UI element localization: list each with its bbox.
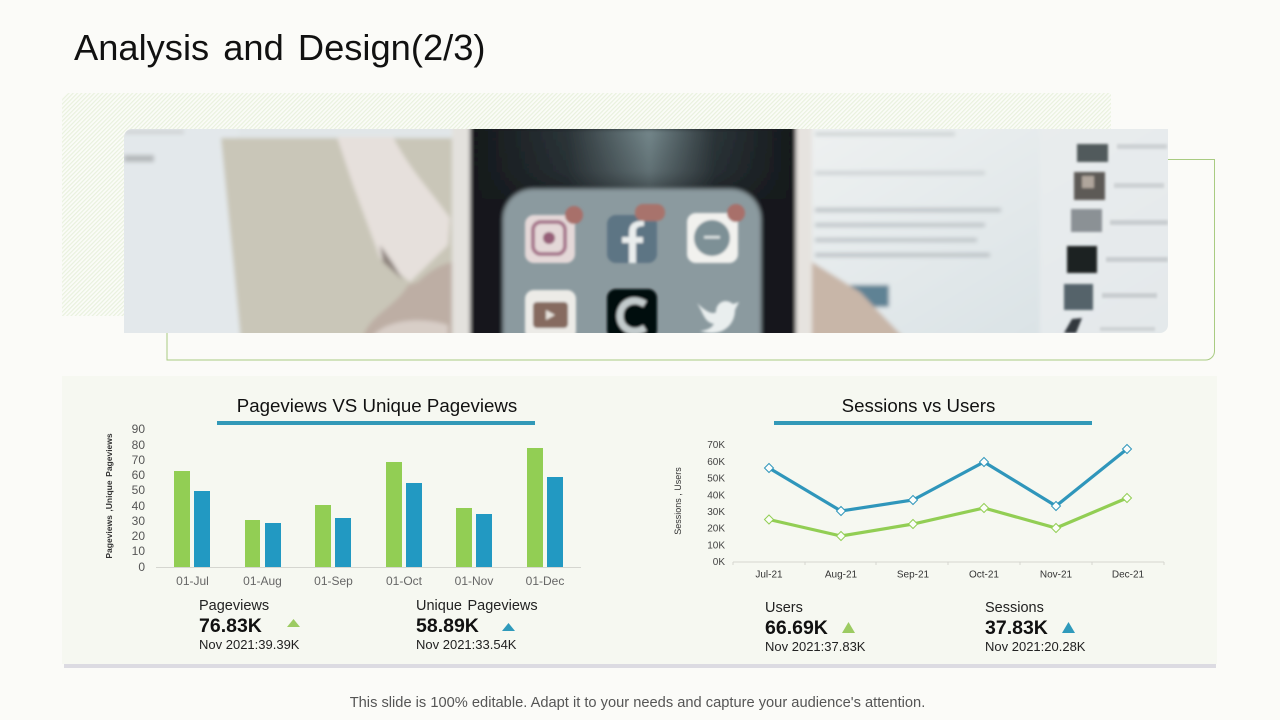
- x axis labels: 01-Aug: [243, 574, 282, 588]
- youtube icon: [525, 290, 576, 340]
- x axis labels: 01-Jul: [176, 574, 209, 588]
- stat: sessions: 37.83K: [985, 617, 1048, 639]
- stat: users: [765, 600, 866, 654]
- upper hand: [337, 137, 450, 282]
- phone body: [452, 123, 472, 339]
- heading: pageviews chart: Pageviews VS Unique Pageviews: [237, 395, 517, 416]
- bottom-right hand: [812, 262, 906, 340]
- stat: sessions: Sessions: [985, 600, 1044, 616]
- left paper: [118, 123, 238, 339]
- x axis labels: 01-Dec: [526, 574, 564, 588]
- stat: sessions: Nov 2021:20.28K: [985, 639, 1086, 654]
- blue bars: [194, 477, 563, 567]
- y axis labels: 70K: [707, 440, 725, 451]
- y axis labels: 10K: [707, 540, 725, 552]
- footer note: This slide is 100% editable. Adapt it to your needs and capture your audience's attention.: [350, 695, 925, 711]
- facebook icon: [607, 215, 657, 263]
- y axis labels: 60K: [707, 457, 725, 468]
- y axis labels: 60: [132, 468, 145, 482]
- instagram icon: [525, 215, 575, 263]
- stat: pageviews: 76.83K: [199, 615, 262, 637]
- stat: pageviews: [199, 598, 300, 652]
- y axis labels: 90: [132, 422, 145, 436]
- hatched backdrop panel: [62, 93, 1111, 316]
- panel: charts background: [62, 376, 1217, 668]
- x axis labels: [176, 574, 564, 588]
- black C icon: [607, 289, 657, 339]
- x axis labels: Jul-21: [755, 570, 783, 580]
- right paper: [812, 129, 960, 205]
- x axis labels: 01-Sep: [314, 574, 353, 588]
- beige sheet: [221, 138, 456, 340]
- series: users (green line): [764, 494, 1132, 540]
- heading: sessions chart: [774, 395, 1092, 425]
- y axis labels: [132, 422, 145, 574]
- y axis labels: 30K: [707, 507, 725, 518]
- stat: pageviews: Pageviews: [199, 598, 269, 614]
- y axis title: Pageviews ,Unique Pageviews: [104, 433, 114, 559]
- x axis labels: Dec-21: [1112, 570, 1145, 580]
- x axis: [733, 562, 1164, 565]
- twitter icon: [697, 301, 739, 333]
- y axis labels: 10: [132, 544, 145, 558]
- y axis labels: 0K: [713, 557, 725, 568]
- title: Analysis and Design(2/3): [74, 27, 486, 68]
- x axis labels: Aug-21: [825, 570, 858, 580]
- y axis labels: 40K: [707, 490, 725, 502]
- y axis labels: 50: [132, 483, 145, 497]
- y axis labels: [707, 440, 725, 568]
- stat: unique pageviews: [416, 598, 538, 652]
- x axis labels: Oct-21: [969, 570, 999, 580]
- folder: [499, 184, 765, 333]
- stat: users: 66.69K: [765, 617, 828, 639]
- stat: pageviews: Nov 2021:39.39K: [199, 637, 300, 652]
- x axis labels: 01-Oct: [386, 574, 423, 588]
- blue button: [850, 285, 889, 307]
- y axis title: Sessions , Users: [673, 467, 683, 535]
- y axis labels: 30: [132, 514, 145, 528]
- stat: sessions: [985, 600, 1086, 654]
- green bars: [174, 448, 543, 567]
- y axis labels: 80: [132, 438, 145, 452]
- y axis labels: 0: [138, 560, 145, 574]
- line chart: sessions vs users: [673, 440, 1164, 580]
- stat: unique pageviews: Nov 2021:33.54K: [416, 637, 517, 652]
- green outline frame: [167, 160, 1214, 360]
- photo: phone showing social media apps: [124, 129, 1168, 333]
- x axis labels: 01-Nov: [455, 574, 493, 588]
- lower hand: [364, 262, 452, 333]
- y axis labels: 50K: [707, 474, 725, 484]
- stat: unique pageviews: Unique Pageviews: [416, 598, 538, 614]
- stat: users: Nov 2021:37.83K: [765, 639, 866, 654]
- heading: sessions chart: Sessions vs Users: [842, 395, 995, 416]
- series: sessions (blue line): [764, 444, 1132, 516]
- thumbnails: [1077, 144, 1108, 162]
- stat: users: Users: [765, 600, 803, 616]
- heading: pageviews chart: [217, 395, 535, 425]
- x axis labels: Sep-21: [897, 570, 930, 580]
- x axis labels: Nov-21: [1040, 570, 1073, 580]
- messenger icon: [687, 213, 738, 263]
- bar chart: pageviews vs unique pageviews: [104, 422, 581, 588]
- y axis labels: 20K: [707, 524, 725, 534]
- y axis labels: 70: [132, 453, 145, 467]
- y axis labels: 40: [132, 499, 145, 513]
- thumbnail captions: [1117, 144, 1167, 149]
- y axis labels: 20: [132, 529, 145, 543]
- stat: unique pageviews: 58.89K: [416, 615, 479, 637]
- x axis labels: [755, 570, 1145, 580]
